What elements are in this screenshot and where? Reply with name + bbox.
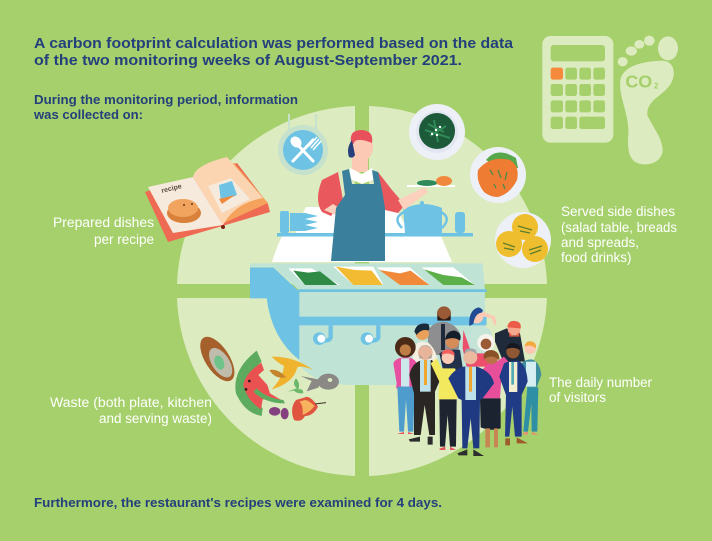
back row woman waving [460, 307, 497, 358]
woman in yellow [431, 349, 462, 450]
label: served side dishes: Served side dishes [561, 204, 675, 219]
icon: hanging cutlery sign [278, 114, 328, 175]
food trays [288, 267, 475, 285]
label: prepared dishes: Prepared dishes [53, 215, 154, 230]
icon: CO2 footprint [618, 36, 678, 164]
label: served side dishes [561, 204, 677, 265]
watermelon rind [235, 351, 285, 416]
apron [331, 169, 385, 261]
back row man with beard [428, 306, 460, 355]
man in dark suit [409, 345, 439, 445]
title: A carbon footprint calculation was performed based on the data [34, 36, 514, 52]
shelf with plates and bottle [277, 211, 337, 236]
shelf with pot and bottle [380, 201, 473, 236]
intro text: During the monitoring period, information [34, 93, 298, 107]
label: daily visitors: The daily number [549, 375, 652, 390]
label: daily visitors: of visitors [549, 390, 606, 405]
serving counter [250, 263, 487, 385]
label: served side dishes: (salad table, breads [561, 220, 677, 235]
man with glasses in navy suit [499, 343, 528, 445]
counter wheels [313, 325, 378, 345]
footer note: Furthermore, the restaurant's recipes were examined for 4 days. [34, 495, 442, 510]
group of visitors [393, 306, 541, 456]
label: prepared dishes [53, 215, 154, 247]
apple core [292, 397, 326, 421]
label: prepared dishes: per recipe [94, 232, 154, 247]
chef behind counter [272, 130, 473, 262]
banana peel [269, 357, 313, 389]
bread crust [193, 331, 241, 387]
icon: carrot salad side dish plate [470, 147, 526, 203]
woman in pink top [480, 350, 508, 447]
food waste illustration [193, 331, 339, 421]
label: waste [50, 395, 212, 426]
label: daily visitors [549, 375, 652, 405]
label: waste: Waste (both plate, kitchen [50, 395, 212, 410]
intro text: was collected on: [33, 108, 143, 122]
label: served side dishes: and spreads, [561, 235, 639, 250]
icon: spinach side dish plate [409, 104, 465, 160]
icon: CO2 footprint: 2 [654, 81, 659, 90]
young man in centre back [413, 324, 437, 362]
serving plate [407, 176, 455, 187]
neck and head [352, 152, 368, 172]
icon: CO2 footprint: CO [625, 72, 652, 92]
fish bone [301, 374, 339, 391]
title [34, 36, 514, 69]
recipe book [145, 157, 270, 242]
older woman [463, 330, 495, 367]
intro text [33, 93, 298, 122]
icon: savoury pancakes side dish plate [495, 212, 551, 268]
arm and blouse [318, 172, 343, 216]
icon: calculator [542, 36, 613, 143]
label: waste: and serving waste) [99, 411, 212, 426]
title: of the two monitoring weeks of August-September 2021. [34, 53, 462, 69]
herb leaf [287, 378, 303, 393]
woman centre with dark hair [439, 331, 463, 372]
back row man red hair [495, 321, 525, 362]
panel: four-quadrant circle [177, 106, 547, 476]
recipe book: recipe [161, 183, 183, 195]
older man in blue suit [448, 348, 494, 456]
woman with curly hair [393, 337, 417, 434]
woman with arms crossed [522, 341, 541, 435]
grapes [269, 407, 289, 419]
label: served side dishes: food drinks) [561, 250, 632, 265]
